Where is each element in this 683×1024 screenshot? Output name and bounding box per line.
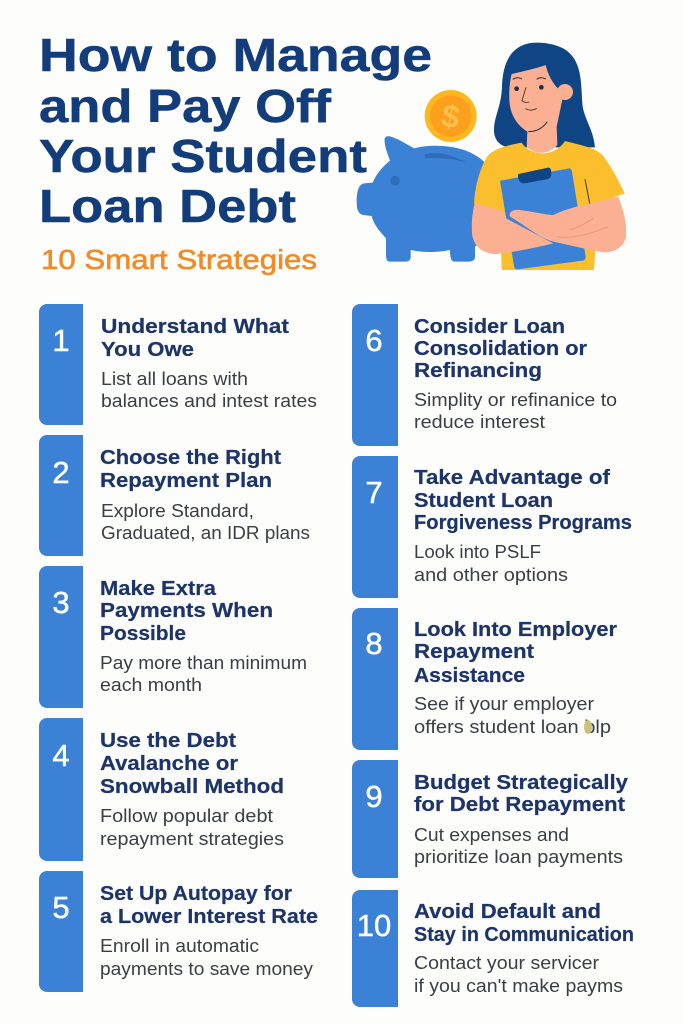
heading 6: Refinancing [414, 360, 542, 382]
icon: dollar coin: $ [439, 97, 463, 136]
description 10 [414, 953, 623, 996]
heading 9: for Debt Repayment [414, 794, 625, 816]
icon: piggy bank [357, 136, 488, 262]
description 2: Explore Standard, [101, 501, 254, 521]
heading 3: Possible [100, 623, 186, 645]
heading 3: Make Extra [100, 578, 217, 600]
heading 8: Assistance [414, 665, 525, 687]
heading 5: a Lower Interest Rate [100, 906, 318, 928]
woman [472, 43, 626, 270]
number tab 5 [39, 871, 83, 992]
heading 7 [414, 467, 632, 534]
heading 5 [100, 883, 318, 928]
heading 3 [100, 578, 273, 645]
panel: strategy 1 [39, 304, 317, 425]
heading 2: Choose the Right [100, 447, 281, 469]
heading 4 [100, 730, 284, 798]
subtitle: 10 Smart Strategies [41, 244, 317, 275]
heading 10: Avoid Default and [414, 901, 601, 923]
number tab 4 [39, 718, 83, 861]
illustration: piggy bank, coin and woman [357, 43, 626, 270]
description 6 [414, 390, 617, 432]
number tab 3 [39, 566, 83, 708]
heading 6 [414, 316, 587, 382]
title [39, 29, 432, 232]
heading 8: Look Into Employer [414, 619, 617, 641]
panel: strategy 4 [39, 718, 284, 861]
heading 6: Consider Loan [414, 316, 565, 338]
description 6: Simplity or refinanice to [414, 390, 617, 410]
heading 8 [414, 619, 617, 687]
number 6: 6 [365, 323, 383, 358]
number 7: 7 [365, 475, 383, 510]
description 5 [100, 936, 313, 979]
heading 7: Forgiveness Programs [414, 512, 632, 534]
description 4: repayment strategies [100, 829, 284, 849]
panel: strategy 6 [352, 304, 617, 446]
panel: strategy 2 [39, 435, 310, 556]
title: and Pay Off [39, 80, 332, 132]
panel: strategy 7 [352, 456, 632, 598]
heading 7: Student Loan [414, 490, 553, 512]
heading 4: Snowball Method [100, 776, 284, 798]
heading 2 [100, 447, 281, 492]
heading 1: Understand What [101, 316, 289, 338]
description 8: See if your employer [414, 694, 594, 714]
description 9 [414, 825, 623, 867]
description 9: Cut expenses and [414, 825, 569, 845]
number tab 9 [352, 760, 398, 878]
panel: strategy 5 [39, 871, 318, 992]
description 2 [101, 501, 310, 543]
heading 1 [101, 316, 289, 361]
heading 1: You Owe [101, 339, 194, 361]
heading 10: Stay in Communication [414, 924, 634, 946]
description 1 [101, 369, 317, 411]
description 8 [414, 694, 611, 737]
description 4 [100, 806, 284, 849]
heading 4: Avalanche or [100, 753, 238, 775]
heading 9: Budget Strategically [414, 772, 629, 794]
description 2: Graduated, an IDR plans [101, 523, 310, 543]
heading 5: Set Up Autopay for [100, 883, 292, 905]
description 9: prioritize loan payments [414, 847, 623, 867]
icon: dollar coin [425, 90, 477, 142]
heading 7: Take Advantage of [414, 467, 610, 489]
description 1: List all loans with [101, 369, 248, 389]
title: Your Student [39, 130, 367, 182]
number 2: 2 [52, 455, 70, 490]
description 6: reduce interest [414, 412, 545, 432]
number tab 8 [352, 608, 398, 750]
description 4: Follow popular debt [100, 806, 273, 826]
description 7: and other options [414, 565, 568, 585]
heading 8: Repayment [414, 641, 534, 663]
description 5: payments to save money [100, 959, 313, 979]
number tab 10 [352, 890, 398, 1007]
number 4: 4 [52, 738, 70, 773]
description 3: each month [100, 675, 202, 695]
number 3: 3 [52, 585, 70, 620]
heading 10 [414, 901, 634, 946]
number tab 7 [352, 456, 398, 598]
number 5: 5 [52, 890, 70, 925]
description 3: Pay more than minimum [100, 653, 307, 673]
description 8: offers student loan blp [414, 717, 611, 737]
number tab 2 [39, 435, 83, 556]
title: Loan Debt [39, 180, 296, 232]
panel: strategy 8 [352, 608, 617, 750]
panel: strategy 9 [352, 760, 629, 878]
heading 9 [414, 772, 629, 816]
number 1: 1 [52, 323, 70, 358]
description 7: Look into PSLF [414, 542, 541, 562]
number 9: 9 [365, 779, 383, 814]
heading 4: Use the Debt [100, 730, 236, 752]
description 10: Contact your servicer [414, 953, 599, 973]
panel: strategy 3 [39, 566, 307, 708]
description 7 [414, 542, 568, 585]
number 8: 8 [365, 626, 383, 661]
number tab 1 [39, 304, 83, 425]
panel: strategy 10 [352, 890, 634, 1007]
number tab 6 [352, 304, 398, 446]
description 3 [100, 653, 307, 695]
heading 6: Consolidation or [414, 338, 587, 360]
heading 3: Payments When [100, 600, 273, 622]
heading 2: Repayment Plan [100, 470, 272, 492]
description 10: if you can't make payms [414, 976, 623, 996]
description 5: Enroll in automatic [100, 936, 259, 956]
title: How to Manage [39, 29, 432, 81]
description 1: balances and intest rates [101, 391, 317, 411]
number 10: 10 [357, 908, 391, 943]
